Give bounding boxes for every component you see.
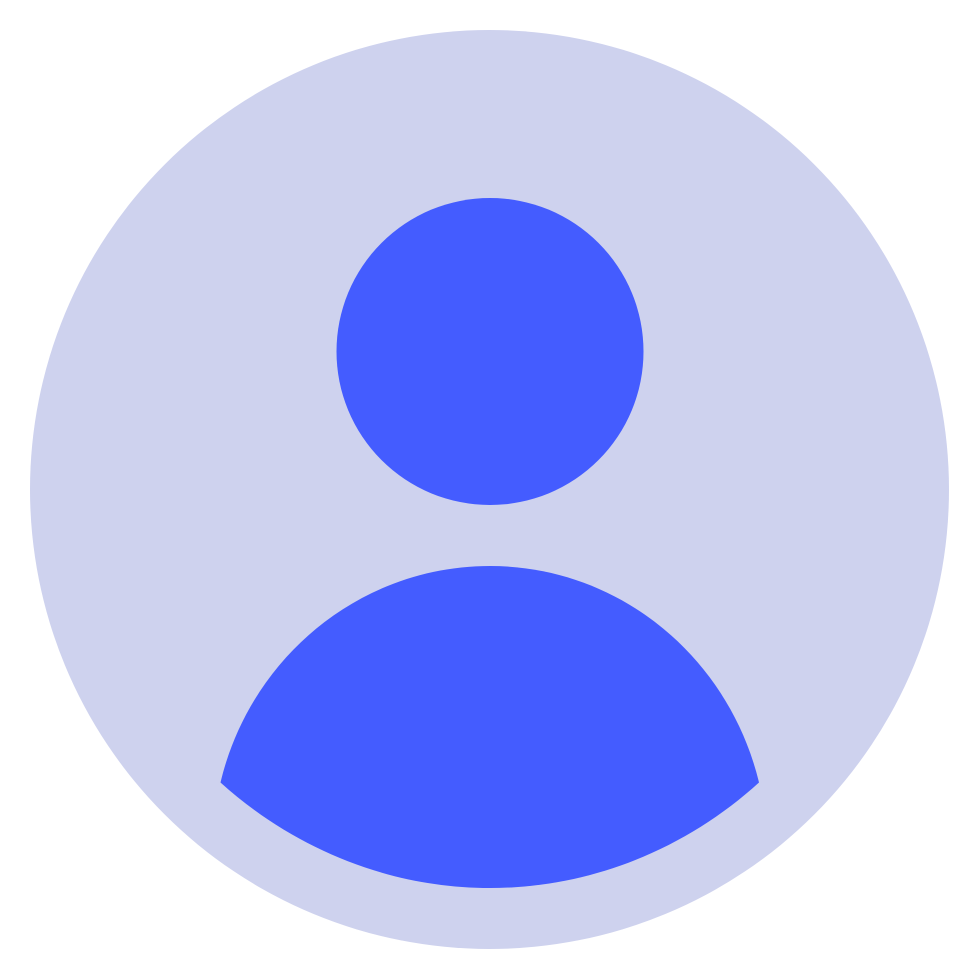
user head	[336, 198, 644, 505]
user shoulders	[220, 566, 759, 888]
